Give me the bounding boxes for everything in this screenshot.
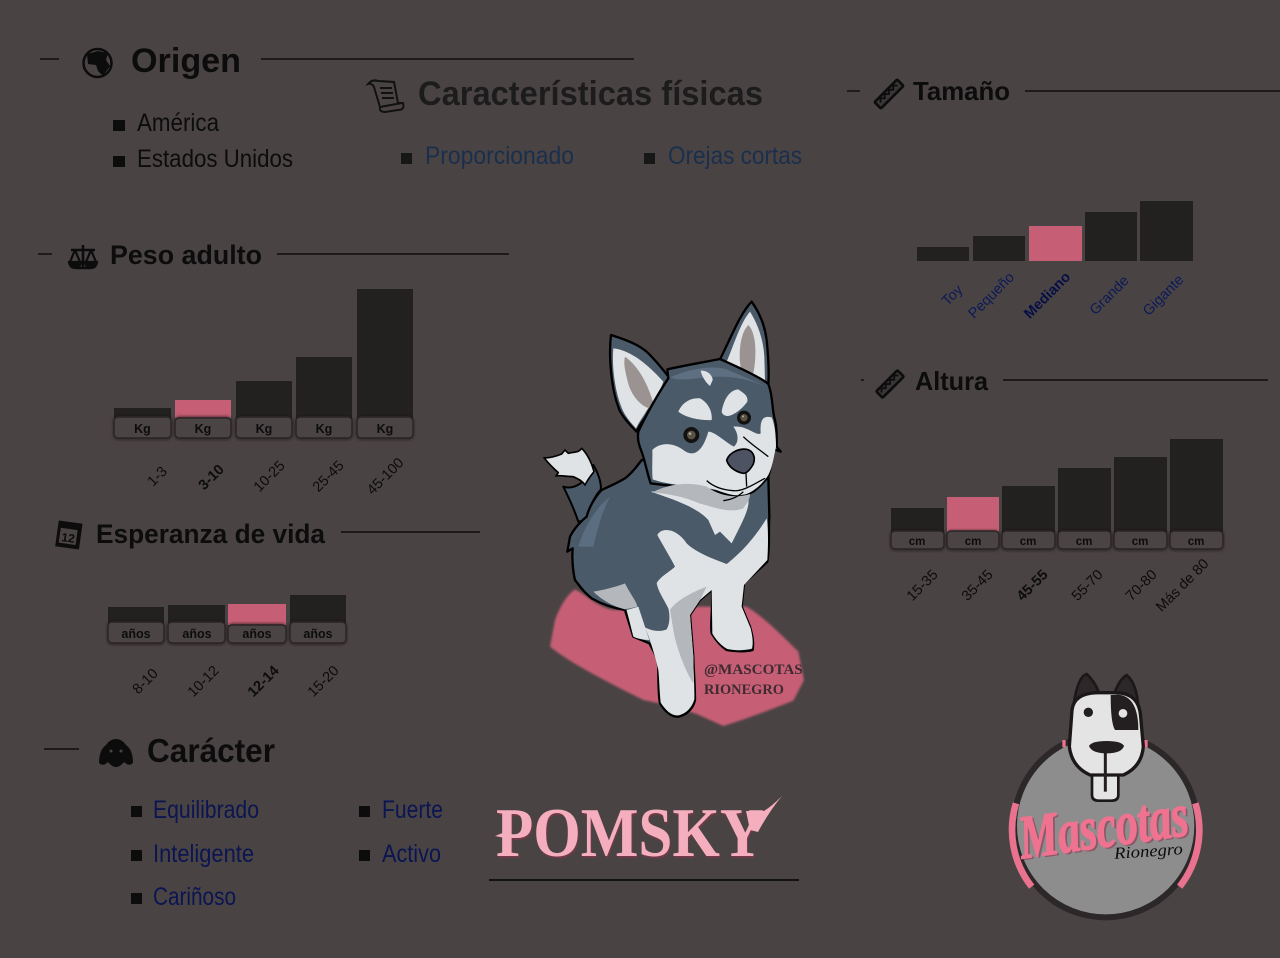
bar chart: peso: Kg bbox=[316, 422, 332, 436]
panel: altura bbox=[861, 366, 1268, 615]
pink arcs bbox=[1012, 740, 1199, 887]
pink floor patch bbox=[550, 589, 804, 726]
bar chart: esperanza: años bbox=[303, 627, 333, 641]
bar chart: esperanza: 15-20 bbox=[305, 663, 342, 700]
heading: Carácter: Carácter bbox=[147, 732, 275, 769]
wordmark bbox=[1014, 781, 1195, 874]
panel: peso adulto bbox=[38, 240, 509, 498]
illustration: pomsky dog: RIONEGRO bbox=[704, 682, 784, 698]
bar chart: peso: 45-100 bbox=[364, 455, 407, 498]
icon: ruler bbox=[876, 370, 904, 398]
logo: Mascotas Rionegro bbox=[1012, 674, 1199, 917]
bar chart: peso: Kg bbox=[195, 422, 211, 436]
bar chart: altura: 15-35 bbox=[904, 567, 941, 604]
list: características bbox=[401, 142, 802, 170]
wordmark: Rionegro bbox=[1112, 839, 1183, 863]
icon: calendar: 12 bbox=[61, 530, 76, 546]
panel: esperanza de vida bbox=[55, 519, 480, 700]
head bbox=[638, 359, 781, 496]
list: carácter bbox=[131, 796, 443, 911]
bar chart: esperanza: años bbox=[121, 627, 151, 641]
illustration: pomsky dog bbox=[544, 302, 804, 726]
heading: Origen: Origen bbox=[131, 42, 241, 80]
title: POMSKY: POMSKY bbox=[497, 797, 765, 874]
list: carácter: Cariñoso bbox=[153, 883, 236, 911]
panel: origen bbox=[40, 42, 634, 173]
bar chart: altura: cm bbox=[1076, 536, 1092, 548]
list: carácter: Equilibrado bbox=[153, 796, 259, 824]
white bib bbox=[651, 491, 749, 543]
body bbox=[567, 460, 769, 717]
inner ears bbox=[624, 325, 755, 408]
bar chart: tamaño: Pequeño bbox=[966, 270, 1018, 322]
bar chart: tamaño: Toy bbox=[939, 282, 967, 309]
icon: calendar bbox=[55, 520, 83, 550]
bar chart: peso: 25-45 bbox=[310, 458, 347, 495]
bar chart: peso: Kg bbox=[256, 422, 272, 436]
tail bbox=[544, 448, 601, 522]
bar chart: altura: cm bbox=[1188, 536, 1204, 548]
bar chart: altura bbox=[891, 439, 1223, 615]
list: origen: Estados Unidos bbox=[137, 145, 293, 173]
list: características: Orejas cortas bbox=[668, 142, 802, 170]
face white bbox=[652, 417, 776, 495]
list: características: Proporcionado bbox=[425, 142, 574, 170]
logo dog bbox=[1069, 674, 1143, 801]
bar chart: peso: Kg bbox=[377, 422, 393, 436]
list: carácter: Inteligente bbox=[153, 840, 254, 868]
bar chart: esperanza: años bbox=[182, 627, 212, 641]
bar chart: altura: 45-55 bbox=[1014, 567, 1051, 604]
bar chart: tamaño: Mediano bbox=[1021, 269, 1074, 322]
heading: Peso adulto: Peso adulto bbox=[110, 240, 262, 270]
icon: scroll bbox=[368, 80, 403, 112]
ears bbox=[610, 302, 769, 432]
list: carácter: Fuerte bbox=[382, 796, 443, 824]
wordmark: Mascotas bbox=[1014, 781, 1192, 872]
bar chart: peso: 3-10 bbox=[196, 462, 228, 494]
chest and leg white bbox=[645, 518, 768, 715]
leg shade bbox=[670, 587, 707, 683]
panel: características físicas bbox=[368, 75, 802, 170]
bar chart: altura: cm bbox=[1132, 536, 1148, 548]
bar chart: peso: 10-25 bbox=[251, 458, 288, 495]
bar chart: esperanza: 12-14 bbox=[245, 663, 282, 700]
title: POMSKY: POMSKY bbox=[496, 795, 764, 872]
ear white bbox=[613, 312, 765, 428]
list: carácter: Activo bbox=[382, 840, 441, 868]
bar chart: tamaño: Grande bbox=[1087, 273, 1132, 318]
eyebrow marks bbox=[678, 371, 747, 420]
icon: scales bbox=[69, 245, 97, 268]
bar chart: esperanza bbox=[108, 595, 346, 700]
heading: Tamaño: Tamaño bbox=[913, 76, 1010, 106]
eyes bbox=[683, 411, 751, 443]
bar chart: altura: 55-70 bbox=[1069, 567, 1106, 604]
bar chart: altura: Más de 80 bbox=[1153, 556, 1212, 615]
logo disc bbox=[1014, 734, 1197, 917]
nose bbox=[727, 449, 754, 473]
bar chart: tamaño: Gigante bbox=[1140, 272, 1187, 319]
bar chart: tamaño bbox=[917, 201, 1193, 322]
bar chart: esperanza: 10-12 bbox=[185, 663, 222, 700]
icon: dog head bbox=[99, 739, 133, 767]
bar chart: esperanza: años bbox=[242, 627, 272, 641]
list: origen: América bbox=[137, 109, 219, 137]
heading: Características físicas: Características físicas bbox=[418, 75, 763, 113]
chin shade bbox=[652, 484, 750, 510]
bar chart: peso: 1-3 bbox=[145, 464, 171, 490]
bar chart: altura: 35-45 bbox=[959, 567, 996, 604]
panel: carácter bbox=[44, 732, 443, 911]
bar chart: peso bbox=[114, 289, 413, 498]
body highlight bbox=[578, 497, 610, 547]
panel: tamaño bbox=[847, 76, 1280, 322]
mouth bbox=[707, 437, 768, 501]
icon: ruler bbox=[875, 80, 903, 108]
bar chart: altura: cm bbox=[965, 536, 981, 548]
bar chart: altura: cm bbox=[909, 536, 925, 548]
bar chart: altura: cm bbox=[1020, 536, 1036, 548]
rear paw bbox=[627, 607, 649, 640]
watermark: @MASCOTAS bbox=[704, 662, 803, 678]
bar chart: esperanza: 8-10 bbox=[130, 666, 162, 698]
bar chart: peso: Kg bbox=[134, 422, 151, 436]
heading: Esperanza de vida: Esperanza de vida bbox=[96, 519, 326, 549]
heading: Altura: Altura bbox=[915, 366, 989, 396]
icon: globe bbox=[84, 49, 112, 77]
head top highlight bbox=[670, 367, 766, 387]
bar chart: altura: 70-80 bbox=[1123, 567, 1160, 604]
list: origen bbox=[113, 109, 293, 173]
wordmark: Mascotas bbox=[1016, 783, 1195, 874]
